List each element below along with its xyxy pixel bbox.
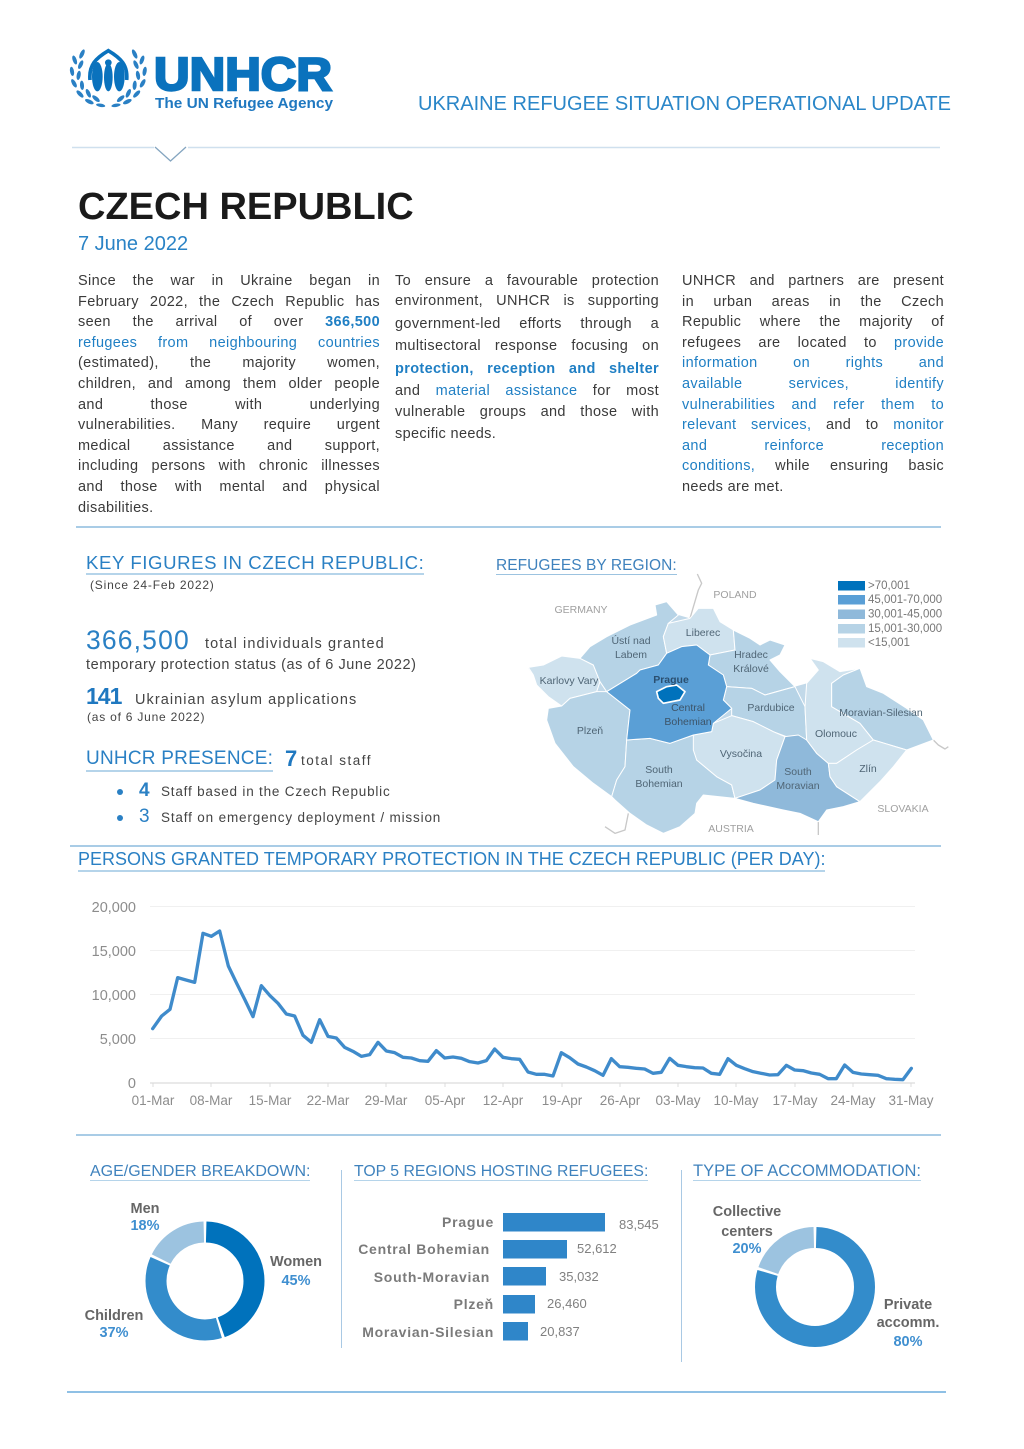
line chart: temporary protection per day: 22-Mar [307, 1093, 350, 1108]
map: refugees by region: Liberec [686, 627, 720, 639]
text block: column 2: vulnerable groups and those with [395, 404, 659, 420]
bar chart: top 5 regions [358, 1213, 659, 1340]
panel: type of accommodation [693, 1162, 939, 1350]
text block: column 1: including persons with chronic illnesses [78, 458, 380, 474]
line chart: temporary protection per day: 05-Apr [425, 1093, 466, 1108]
map: refugees by region: South [784, 766, 812, 778]
text block: column 2: specific needs. [395, 426, 496, 442]
bar chart: top 5 regions: 83,545 [619, 1217, 659, 1232]
donut: age and gender: 45% [281, 1273, 311, 1289]
heading: key figures: KEY FIGURES IN CZECH REPUBLIC: [86, 552, 424, 573]
donut: age and gender: Children [85, 1308, 143, 1324]
line chart: temporary protection per day [92, 900, 934, 1108]
line chart: temporary protection per day: 26-Apr [600, 1093, 641, 1108]
line chart: temporary protection per day: 15,000 [92, 944, 136, 960]
bar chart: top 5 regions: 20,837 [540, 1324, 580, 1339]
figure text: total staff: total staff [301, 753, 372, 768]
bullet: staff based: 4 [139, 780, 150, 801]
figure text: individuals: total individuals granted [205, 636, 385, 652]
text block: column 2: environment, UNHCR is supporting [395, 293, 659, 309]
donut: age and gender: Men [130, 1201, 160, 1217]
map: refugees by region: Olomouc [815, 728, 857, 740]
text block: column 3: available services, identify [682, 376, 944, 392]
text block: column 1: medical assistance and support, [78, 438, 380, 454]
map: refugees by region: GERMANY [554, 604, 608, 616]
map: refugees by region: Prague [653, 674, 689, 686]
bullet: staff deployed: Staff on emergency deployment / mission [161, 810, 441, 825]
donut: age and gender: 18% [130, 1218, 160, 1234]
line chart: temporary protection per day: 29-Mar [365, 1093, 408, 1108]
text block: column 2: To ensure a favourable protection [395, 273, 659, 289]
header divider with chevron [72, 146, 940, 162]
map: refugees by region: South [645, 764, 673, 776]
text block: column 2: multisectoral response focusing on [395, 338, 659, 354]
text block: column 1: (estimated), the majority women, [78, 355, 380, 371]
map: refugees by region: Moravian [776, 780, 820, 792]
text block: column 3: information on rights and [682, 355, 944, 371]
line chart: temporary protection per day: 08-Mar [190, 1093, 233, 1108]
panel: top 5 regions [354, 1162, 659, 1340]
map: refugees by region: Hradec [734, 649, 768, 661]
bar chart: top 5 regions: 52,612 [577, 1241, 617, 1256]
map legend: 30,001-45,000 [868, 608, 942, 620]
line chart: temporary protection per day: 20,000 [92, 900, 136, 916]
map: refugees by region: Ústí nad [611, 634, 651, 647]
map: refugees by region: Vysočina [720, 748, 762, 760]
text block: column 1 [78, 273, 380, 516]
heading: top 5 regions: TOP 5 REGIONS HOSTING REFUGEES: [354, 1162, 648, 1180]
logo: UNHCR The UN Refugee Agency [70, 48, 334, 112]
line chart: temporary protection per day: 15-Mar [249, 1093, 292, 1108]
text block: column 3: Republic where the majority of [682, 314, 944, 330]
text block: column 1: refugees from neighbouring countries [78, 335, 380, 351]
text block: column 3: relevant services, and to monitor [682, 417, 944, 433]
text block: column 3: UNHCR and partners are present [682, 273, 944, 289]
text block: column 3: needs are met. [682, 479, 784, 495]
heading: persons granted temporary protection: PERSONS GRANTED TEMPORARY PROTECTION IN THE CZECH REPUBLIC (PER DAY): [78, 849, 825, 869]
logo: UNHCR The UN Refugee Agency: UNHCR [154, 48, 332, 100]
map: refugees by region: SLOVAKIA [877, 803, 929, 815]
bar chart: top 5 regions: Central Bohemian [358, 1241, 490, 1257]
map: refugees by region: Králové [733, 663, 769, 675]
bar chart: top 5 regions: South-Moravian [374, 1269, 490, 1285]
bar chart: top 5 regions: Moravian-Silesian [362, 1324, 494, 1340]
donut: age and gender: Women [270, 1254, 322, 1270]
donut: age and gender: 37% [99, 1325, 129, 1341]
line chart: temporary protection per day: 5,000 [100, 1032, 136, 1048]
logo: UNHCR The UN Refugee Agency: The UN Refugee Agency [155, 96, 333, 112]
text block: column 3: vulnerabilities and refer them to [682, 397, 944, 413]
text block: column 1: children, and among them older people [78, 376, 380, 392]
line chart: temporary protection per day: 10-May [713, 1093, 759, 1108]
figure: 366,500: 366,500 [86, 625, 190, 655]
period note: (Since 24-Feb 2022) [90, 578, 215, 592]
line chart: temporary protection per day: 01-Mar [132, 1093, 175, 1108]
title: CZECH REPUBLIC [78, 186, 414, 228]
map: refugees by region: POLAND [713, 589, 757, 601]
figure text: temporary protection: temporary protection status (as of 6 June 2022) [86, 657, 417, 673]
map legend: <15,001 [868, 637, 910, 649]
map: refugees by region [528, 574, 949, 835]
map: refugees by region: Plzeň [577, 725, 603, 737]
donut: type of accommodation: centers [721, 1224, 773, 1240]
figure: 141: 141 [86, 683, 121, 709]
bar chart: top 5 regions: 26,460 [547, 1296, 587, 1311]
bullet: staff deployed [117, 806, 441, 827]
text block: column 1: Since the war in Ukraine began in [78, 273, 380, 289]
bar chart: top 5 regions: Plzeň [454, 1296, 494, 1312]
figure note: date: (as of 6 June 2022) [87, 710, 205, 724]
text block: column 1: disabilities. [78, 500, 153, 516]
figure text: asylum applications: Ukrainian asylum applications [135, 692, 357, 708]
text block: column 2: and material assistance for most [395, 382, 659, 398]
bar chart: top 5 regions: Prague [442, 1214, 494, 1230]
map: refugees by region: Central [671, 702, 705, 714]
donut: type of accommodation: accomm. [877, 1315, 939, 1331]
text block: column 2: government-led efforts through a [395, 316, 659, 332]
text block: column 1: and those with mental and physical [78, 479, 380, 495]
line chart: temporary protection per day: 24-May [830, 1093, 876, 1108]
line chart: temporary protection per day: 19-Apr [542, 1093, 583, 1108]
heading: age gender: AGE/GENDER BREAKDOWN: [90, 1162, 310, 1180]
text block: column 3: conditions, while ensuring basic [682, 458, 944, 474]
text block: column 1: seen the arrival of over 366,500 [78, 314, 380, 330]
bullet: staff based [117, 780, 391, 801]
report series heading: UKRAINE REFUGEE SITUATION OPERATIONAL UPDATE [418, 93, 951, 115]
map legend: >70,001 [868, 580, 910, 592]
map legend: 45,001-70,000 [868, 594, 942, 606]
line chart: temporary protection per day: 12-Apr [483, 1093, 524, 1108]
text block: column 1: and those with underlying [78, 397, 380, 413]
line chart: temporary protection per day: 0 [128, 1076, 136, 1092]
line chart: temporary protection per day: 10,000 [92, 988, 136, 1004]
text block: column 2: protection, reception and shelter [395, 360, 659, 376]
text block: column 3: refugees are located to provide [682, 335, 944, 351]
donut: type of accommodation: Collective [713, 1204, 781, 1220]
map: refugees by region: Moravian-Silesian [839, 707, 923, 719]
map legend [838, 580, 942, 649]
line chart: temporary protection per day: 31-May [888, 1093, 934, 1108]
text block: column 2 [395, 273, 659, 442]
line chart: temporary protection per day: 17-May [772, 1093, 818, 1108]
donut: type of accommodation: Private [884, 1297, 932, 1313]
figure: total staff: 7 [285, 746, 297, 771]
text block: column 3: in urban areas in the Czech [682, 294, 944, 310]
date: 7 June 2022 [78, 233, 188, 255]
map: refugees by region: Bohemian [635, 778, 683, 790]
bar chart: top 5 regions: 35,032 [559, 1269, 599, 1284]
map: refugees by region: Zlín [859, 763, 877, 775]
map: refugees by region: Bohemian [664, 716, 712, 728]
heading: type of accommodation: TYPE OF ACCOMMODATION: [693, 1162, 921, 1180]
map: refugees by region: Pardubice [747, 702, 795, 714]
donut: type of accommodation [713, 1204, 939, 1350]
map: refugees by region: Karlovy Vary [540, 675, 599, 687]
donut: age and gender [85, 1201, 322, 1341]
donut: type of accommodation: 80% [893, 1334, 923, 1350]
heading: UNHCR presence: UNHCR PRESENCE: [86, 748, 273, 769]
text block: column 1: February 2022, the Czech Republic has [78, 294, 380, 310]
text block: column 3: and reinforce reception [682, 438, 944, 454]
heading: refugees by region: REFUGEES BY REGION: [496, 557, 677, 574]
text block: column 3 [682, 273, 944, 495]
panel: age and gender breakdown [85, 1162, 322, 1341]
panel: key figures [86, 552, 441, 827]
map: refugees by region: Labem [615, 649, 647, 661]
map legend: 15,001-30,000 [868, 623, 942, 635]
line chart: temporary protection per day: 03-May [655, 1093, 701, 1108]
bullet: staff deployed: 3 [139, 806, 150, 827]
bullet: staff based: Staff based in the Czech Republic [161, 784, 391, 799]
donut: type of accommodation: 20% [732, 1241, 762, 1257]
map: refugees by region: AUSTRIA [708, 823, 754, 835]
text block: column 1: vulnerabilities. Many require urgent [78, 417, 380, 433]
